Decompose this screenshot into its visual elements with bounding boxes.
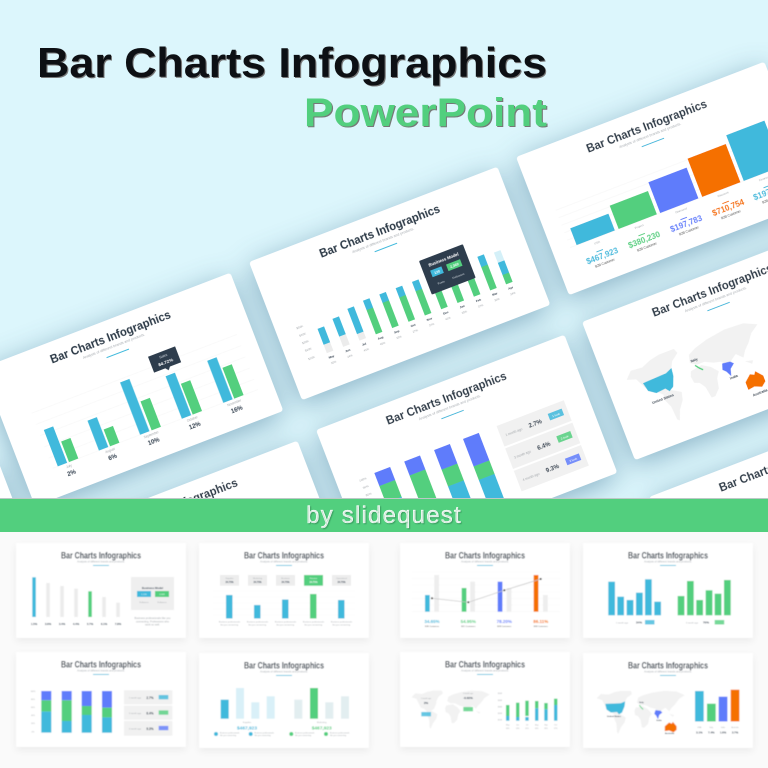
thumbnail: bars with callouts: Business professionals [275, 620, 296, 624]
thumbnail: single highlighted bars [16, 543, 186, 638]
tooltip: business model: Followers [452, 272, 466, 280]
thumbnail: bars with callouts [199, 543, 369, 638]
slide: stacked columns with month panels: 90% [362, 484, 370, 490]
tooltip: business model: 120 [434, 269, 441, 275]
thumbnail: map with colored bars: India [656, 720, 662, 722]
slide: grouped bars with tooltip: 12% [188, 421, 202, 431]
thumbnail: single highlighted bars: Followers [157, 601, 168, 604]
lower background [0, 530, 768, 768]
thumbnail: bars with trend line: 78.20% [497, 619, 512, 624]
slide: monthly stacked bars: Mar [492, 291, 499, 297]
thumbnail: map with stacked bars: $50K [498, 693, 503, 695]
thumbnail: bars with callouts: like you connecting. [304, 624, 323, 626]
slide: monthly stacked bars: Dec [443, 310, 449, 316]
slide: world map: United States [652, 393, 674, 405]
thumbnail: map with stacked bars [400, 652, 570, 747]
thumbnail: bars with trend line: B2B Customers [534, 625, 548, 628]
thumbnail: map with stacked bars: Oct [554, 724, 558, 726]
slide: ascending wide bars: Diamond [675, 206, 688, 214]
slide: partially hidden lower left [0, 462, 51, 695]
slide: stacked columns with month panels: 60% [371, 506, 378, 512]
tooltip: business model: Business Model [428, 252, 459, 268]
thumbnail: single highlighted bars: Business Model [142, 586, 163, 590]
thumbnail: map with stacked bars: Bar Charts Infographics [445, 660, 525, 670]
thumbnail: highlighted pairs: Marketing [317, 721, 327, 724]
thumbnail: highlighted pairs: Analysis of different brands and products. [260, 670, 308, 674]
slide: monthly stacked bars: Oct [410, 323, 416, 328]
slide: monthly stacked bars: $30K [301, 339, 309, 345]
slide: ascending wide bars: B2B Customer [637, 241, 658, 253]
thumbnail: bars with callouts: 34.75% [281, 581, 290, 584]
slide: ascending wide bars: $710,754 [711, 197, 746, 218]
thumbnail: map with stacked bars: $40K [498, 700, 503, 702]
thumbnail: bars with callouts: Marketing [253, 577, 263, 580]
thumbnail: bars with callouts: Business professionals [303, 620, 324, 624]
slide: ascending wide bars: Discount [717, 190, 729, 198]
slide: ascending wide bars: USA [593, 240, 601, 246]
thumbnail: stacked columns: 4 month ago [129, 728, 142, 730]
thumbnail: bars with callouts: like you connecting. [220, 624, 239, 626]
slide: monthly stacked bars: 37% [428, 322, 435, 328]
slide: monthly stacked bars: Feb [475, 297, 482, 303]
slide: partially hidden lower centre: Bar Charts Infographics [115, 475, 240, 534]
thumbnail: map with colored bars: 7.4% [708, 730, 715, 734]
thumbnail: map with colored bars: 3.1% [696, 730, 703, 734]
thumbnail: stacked columns: Bar Charts Infographics [61, 660, 141, 670]
thumbnail: single highlighted bars: 5.7% [87, 622, 94, 626]
panel: month rows: 2.7% [528, 419, 544, 430]
thumbnail: highlighted pairs: like you connecting. [220, 734, 237, 737]
slide: partially hidden lower right [649, 402, 768, 635]
panel: month rows: 9.3% [545, 464, 561, 475]
heading: Bar Charts Infographics: Bar Charts Infographics [37, 39, 547, 86]
slide: world map: Analysis of different brands and products. [684, 286, 747, 313]
slide: ascending wide bars [516, 62, 768, 295]
slide: monthly stacked bars: 41% [445, 315, 452, 321]
thumbnail: highlighted pairs: $467,923 [312, 726, 332, 732]
thumbnail: map with colored bars: United States [607, 715, 622, 718]
thumbnail: single highlighted bars: 3.4% [59, 622, 66, 626]
thumbnail: map with stacked bars: May [506, 724, 509, 726]
slide: grouped bars with tooltip: Analysis of different brands and products. [82, 333, 146, 360]
thumbnail: map with stacked bars: 30% [506, 728, 510, 730]
slide: grouped bars with tooltip: 16% [230, 405, 244, 415]
thumbnail: single highlighted bars: 4.4% [73, 622, 80, 626]
thumbnail: bars with callouts: 34.75% [253, 581, 262, 584]
thumbnail: single highlighted bars: work so well. [145, 623, 160, 627]
thumbnail: map with colored bars: India [721, 727, 726, 729]
thumbnail: bars with callouts: Finance [310, 578, 318, 580]
slide: monthly stacked bars: 27% [412, 328, 419, 334]
slide: grouped bars with tooltip: 6% [108, 453, 119, 462]
thumbnail: stacked columns: 100% [31, 691, 36, 693]
thumbnail: bars with trend line: Analysis of different brands and products. [461, 560, 509, 564]
slide: monthly stacked bars: Bar Charts Infographics [317, 202, 442, 261]
slide: partially hidden lower centre [49, 441, 350, 674]
thumbnail: stacked columns: 40% [31, 715, 35, 717]
panel: month rows: 6.4% [537, 441, 552, 452]
slide: grouped bars with tooltip: 2% [67, 469, 78, 478]
tooltip: sales: 84.72% [157, 357, 174, 367]
thumbnail: highlighted pairs [199, 653, 369, 748]
slide: monthly stacked bars: Aug [377, 335, 384, 341]
slide: monthly stacked bars: Jun [345, 348, 351, 353]
thumbnail: single highlighted bars: 1.5% [31, 622, 38, 626]
thumbnail: map with stacked bars: $10K [498, 720, 503, 722]
thumbnail: bars with callouts: like you connecting. [248, 624, 267, 626]
thumbnail: bars with callouts: 34.75% [225, 581, 234, 584]
thumbnail: two bar groups: 3 month ago [686, 621, 699, 624]
thumbnail: single highlighted bars: Bar Charts Infographics [61, 550, 141, 560]
banner [0, 498, 768, 532]
thumbnail: stacked columns: 6.4% [146, 711, 154, 715]
slide: monthly stacked bars: 24% [509, 290, 517, 296]
thumbnail: two bar groups: Bar Charts Infographics [628, 550, 708, 560]
thumbnail: bars with callouts: like you connecting. [332, 624, 351, 626]
thumbnail: single highlighted bars: 3.6% [45, 622, 52, 626]
thumbnail: map with colored bars: USA [697, 726, 702, 729]
slide: monthly stacked bars: $40K [299, 331, 307, 338]
thumbnail: stacked columns: 3 month ago [129, 712, 142, 715]
thumbnail: highlighted pairs: Business professionals [295, 732, 314, 734]
thumbnail: two bar groups: Analysis of different brands and products. [644, 560, 692, 564]
thumbnail: single highlighted bars: connecting. Professions who [136, 619, 170, 623]
slide: grouped bars with tooltip: September [143, 430, 160, 439]
thumbnail: stacked columns: 1 month ago [129, 696, 142, 700]
thumbnail: map with stacked bars: Jul [526, 724, 529, 726]
thumbnail: stacked columns [16, 652, 186, 747]
slide: world map: Australia [752, 388, 768, 397]
thumbnail shadows [16, 546, 753, 751]
slide: world map [582, 227, 768, 460]
thumbnail: highlighted pairs: like you connecting. [295, 734, 312, 737]
slide: grouped bars with tooltip: July [66, 463, 73, 469]
slide: monthly stacked bars: 41% [363, 347, 370, 353]
thumbnail: map with stacked bars: Aug [535, 724, 538, 726]
thumbnail: map with colored bars: Australia [731, 726, 740, 729]
slide: monthly stacked bars: 24% [347, 353, 354, 359]
slide: grouped bars with tooltip [0, 273, 283, 506]
thumbnail: map with stacked bars: $20K [498, 713, 503, 715]
thumbnail: highlighted pairs: Business professionals [330, 732, 349, 734]
thumbnail: bars with trend line: 34.65% [424, 619, 440, 624]
thumbnail: map with colored bars: Italy [639, 701, 644, 704]
slide: monthly stacked bars: 30% [494, 297, 501, 303]
thumbnail: highlighted pairs: Supplies [243, 722, 252, 724]
thumbnail: map with colored bars: Australia [665, 732, 675, 735]
thumbnail: bars with callouts: 34.75% [309, 581, 318, 584]
thumbnail: highlighted pairs: Business professionals [254, 732, 274, 734]
slide: monthly stacked bars: 37% [477, 303, 484, 309]
thumbnail: bars with callouts: Business professionals [219, 620, 240, 624]
thumbnail: highlighted pairs: Bar Charts Infographics [244, 660, 324, 670]
thumbnail: two bar groups: 34% [636, 620, 642, 624]
heading: PowerPoint: PowerPoint [304, 91, 547, 135]
thumbnail: highlighted pairs: like you connecting. [254, 734, 272, 737]
thumbnail: bars with trend line [400, 543, 570, 638]
slide: stacked columns with month panels [316, 335, 617, 568]
panel: month rows: 2 look [560, 434, 570, 441]
slide: grouped bars with tooltip: 10% [147, 437, 161, 447]
thumbnail: bars with trend line: B2C Customers [461, 625, 475, 628]
thumbnail: map with stacked bars: -0.60% [463, 696, 473, 700]
thumbnail: bars with trend line: 86.11% [533, 619, 548, 624]
thumbnail: bars with callouts: Operational [336, 577, 347, 580]
thumbnail: map with stacked bars: 24% [516, 728, 520, 730]
slide: stacked columns with month panels: Analysis of different brands and products. [418, 394, 481, 421]
thumbnail: map with colored bars: Bar Charts Infographics [628, 660, 708, 670]
panel: month rows: 1 month ago [505, 427, 523, 437]
slide: stacked columns with month panels: Bar Charts Infographics [384, 369, 509, 428]
thumbnail: map with stacked bars: Jun [516, 724, 519, 726]
thumbnail: stacked columns: 2.7% [146, 696, 154, 700]
slide: grouped bars with tooltip: Bar Charts Infographics [48, 307, 173, 366]
thumbnail: map with stacked bars: Analysis of different brands and products. [461, 668, 509, 672]
slide: monthly stacked bars: Apr [508, 285, 515, 291]
thumbnail: bars with callouts: Analysis of different brands and products. [260, 560, 308, 564]
thumbnail: bars with callouts: 34.75% [337, 581, 346, 584]
thumbnail: bars with callouts: like you connecting. [276, 624, 295, 626]
thumbnail: map with stacked bars: 41% [525, 728, 529, 730]
thumbnail: two bar groups [583, 543, 753, 638]
thumbnail: map with colored bars [583, 653, 753, 748]
thumbnail: bars with trend line: Bar Charts Infographics [445, 550, 525, 560]
thumbnail: map with stacked bars: 45% [535, 728, 539, 730]
thumbnail: single highlighted bars: 1,126 [141, 594, 148, 596]
slide: world map: India [729, 374, 739, 381]
thumbnail: single highlighted bars: Business professionals like you [134, 616, 171, 620]
thumbnail: bars with callouts: Business [281, 578, 290, 580]
thumbnail: stacked columns: 0% [32, 732, 35, 734]
slide: monthly stacked bars: 35% [461, 309, 468, 315]
thumbnail: map with colored bars: Analysis of different brands and products. [644, 670, 692, 674]
thumbnail: single highlighted bars: 6.1% [101, 622, 108, 626]
page background [0, 0, 768, 500]
tooltip: sales: Sales [159, 353, 168, 360]
panel: month rows: 3 look [569, 456, 578, 463]
tooltip: business model: 2,369 [450, 262, 459, 269]
tooltip: business model [419, 244, 476, 295]
banner: by slidequest [306, 502, 462, 529]
thumbnail: map with stacked bars: 2% [424, 701, 428, 705]
slide: ascending wide bars: Analysis of different brands and products. [619, 122, 682, 149]
slide: ascending wide bars: B2B Customer [679, 225, 700, 237]
slide: monthly stacked bars: May [328, 354, 335, 360]
thumbnail: stacked columns: 20% [31, 723, 35, 725]
slide: monthly stacked bars: 30% [330, 359, 337, 365]
slide: monthly stacked bars: $10K [308, 355, 316, 361]
thumbnail: map with stacked bars: 33% [544, 728, 548, 730]
slide: monthly stacked bars: Jul [361, 342, 367, 347]
thumbnail: single highlighted bars: 7.8% [115, 622, 122, 626]
thumbnail: stacked columns: 9.3% [146, 727, 154, 731]
slide: ascending wide bars: $467,923 [585, 246, 620, 266]
slide: stacked columns with month panels: 50% [374, 514, 381, 520]
thumbnail: stacked columns: 80% [31, 699, 35, 701]
slide: monthly stacked bars: 33% [396, 334, 403, 340]
slide: ascending wide bars: Project [634, 223, 644, 230]
slide: ascending wide bars: $380,230 [627, 230, 662, 250]
thumbnail: single highlighted bars: 2,669 [159, 594, 166, 596]
thumbnail: bars with callouts: Bar Charts Infographics [244, 550, 324, 560]
map [622, 318, 768, 433]
thumbnail: map with colored bars: Italy [710, 726, 713, 729]
tooltip: sales [148, 346, 182, 375]
thumbnail: bars with trend line: 54.95% [461, 619, 476, 624]
panel: month rows [497, 400, 589, 491]
thumbnail: two bar groups: 70% [703, 620, 709, 624]
thumbnail: stacked columns: 60% [31, 707, 35, 709]
panel: month rows: 4 month ago [522, 472, 540, 482]
thumbnail: two bar groups: 1 month ago [616, 621, 629, 624]
slide: monthly stacked bars: 45% [379, 340, 386, 346]
slide: ascending wide bars: Bar Charts Infographics [584, 97, 709, 156]
slide: ascending wide bars: B2B Customer [721, 209, 742, 220]
thumbnail: map with stacked bars: Sep [544, 724, 548, 726]
panel: month rows: 3 month ago [514, 449, 532, 460]
slide: grouped bars with tooltip: October [186, 415, 199, 423]
thumbnail: map with colored bars: 1.6% [720, 730, 727, 734]
thumbnail: map with colored bars: 3.7% [732, 730, 739, 734]
slide: world map: Italy [690, 357, 698, 363]
slide: monthly stacked bars: $50K [296, 324, 304, 330]
thumbnail: single highlighted bars: Analysis of different brands and products. [77, 560, 125, 564]
thumbnail: bars with callouts: Business professionals [247, 620, 268, 624]
tooltip: business model: Posts [437, 279, 446, 286]
thumbnail: map with stacked bars: 27% [554, 728, 558, 730]
slide: monthly stacked bars: Sep [393, 329, 400, 335]
slide: ascending wide bars: B2B Customer [595, 257, 616, 269]
thumbnail: highlighted pairs: Business professionals [220, 732, 239, 734]
slide: stacked columns with month panels: 80% [365, 491, 372, 497]
slide: ascending wide bars: $197,783 [669, 214, 704, 234]
thumbnail: bars with trend line: B2B Customers [425, 625, 439, 628]
slide: monthly stacked bars: Jan [459, 304, 465, 309]
thumbnail: bars with trend line: B2B Customers [497, 625, 511, 628]
thumbnail: highlighted pairs: $467,923 [237, 726, 257, 732]
slide: stacked columns with month panels: 100% [359, 476, 367, 483]
thumbnail: highlighted pairs: like you connecting. [330, 734, 347, 737]
thumbnail: bars with callouts: Supplies [226, 578, 233, 580]
slide: grouped bars with tooltip: August [105, 447, 116, 454]
thumbnail: bars with callouts: Business professionals [331, 620, 352, 624]
thumbnail: stacked columns: Analysis of different brands and products. [77, 668, 125, 672]
panel: month rows: 1 look [552, 411, 561, 418]
slide: stacked columns with month panels: 70% [368, 499, 375, 505]
thumbnail: map with stacked bars: $30K [498, 706, 503, 708]
slide: monthly stacked bars: Analysis of different brands and products. [352, 227, 415, 254]
thumbnail: map with stacked bars: 3 month ago [463, 692, 473, 695]
slide: grouped bars with tooltip: November [227, 398, 243, 407]
thumbnail: map with stacked bars: 1 month ago [421, 697, 431, 700]
slide: monthly stacked bars: Nov [426, 316, 433, 322]
thumbnail: single highlighted bars: Followers [139, 601, 150, 604]
slide: monthly stacked bars [249, 167, 550, 400]
slide: monthly stacked bars: $20K [304, 346, 312, 353]
